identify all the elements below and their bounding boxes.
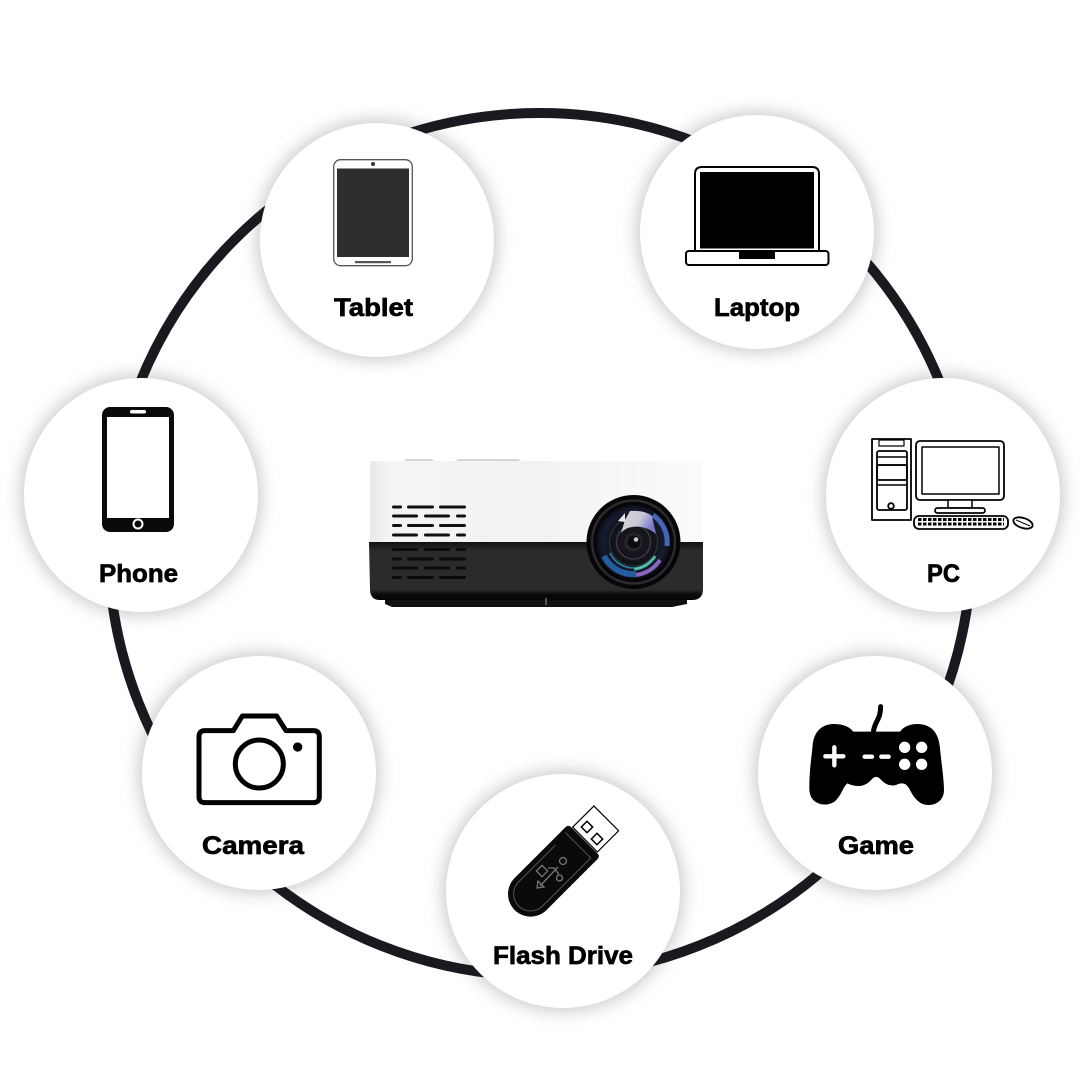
panel: game: [758, 656, 992, 890]
label: tablet: Tablet: [334, 294, 414, 322]
icon: camera: [199, 716, 319, 803]
label: flash drive: Flash Drive: [493, 942, 633, 970]
label: laptop: Laptop: [714, 294, 800, 322]
label: pc: PC: [927, 560, 960, 588]
panel: laptop: [640, 115, 874, 349]
mini projector: [369, 459, 703, 607]
vents: [392, 506, 466, 536]
icon: game controller: [809, 707, 944, 805]
white upper body: [370, 461, 702, 545]
panel: camera: [142, 656, 376, 890]
icon: laptop: [686, 167, 828, 265]
panel: pc: [826, 378, 1060, 612]
icon: tablet: [334, 160, 412, 266]
panel: flash drive: [446, 774, 680, 1008]
icon: phone: [102, 407, 174, 532]
label: camera: Camera: [202, 832, 305, 860]
top buttons: [404, 459, 521, 461]
label: game: Game: [838, 832, 914, 860]
label: phone: Phone: [99, 560, 178, 588]
panel: phone: [24, 378, 258, 612]
icon: usb flash drive: [499, 802, 622, 926]
panel: tablet: [260, 123, 494, 357]
feet: [385, 596, 687, 607]
black lower body: [369, 542, 703, 600]
connecting ring: [108, 113, 972, 976]
lens: [586, 495, 680, 589]
icon: desktop computer: [872, 439, 1034, 531]
